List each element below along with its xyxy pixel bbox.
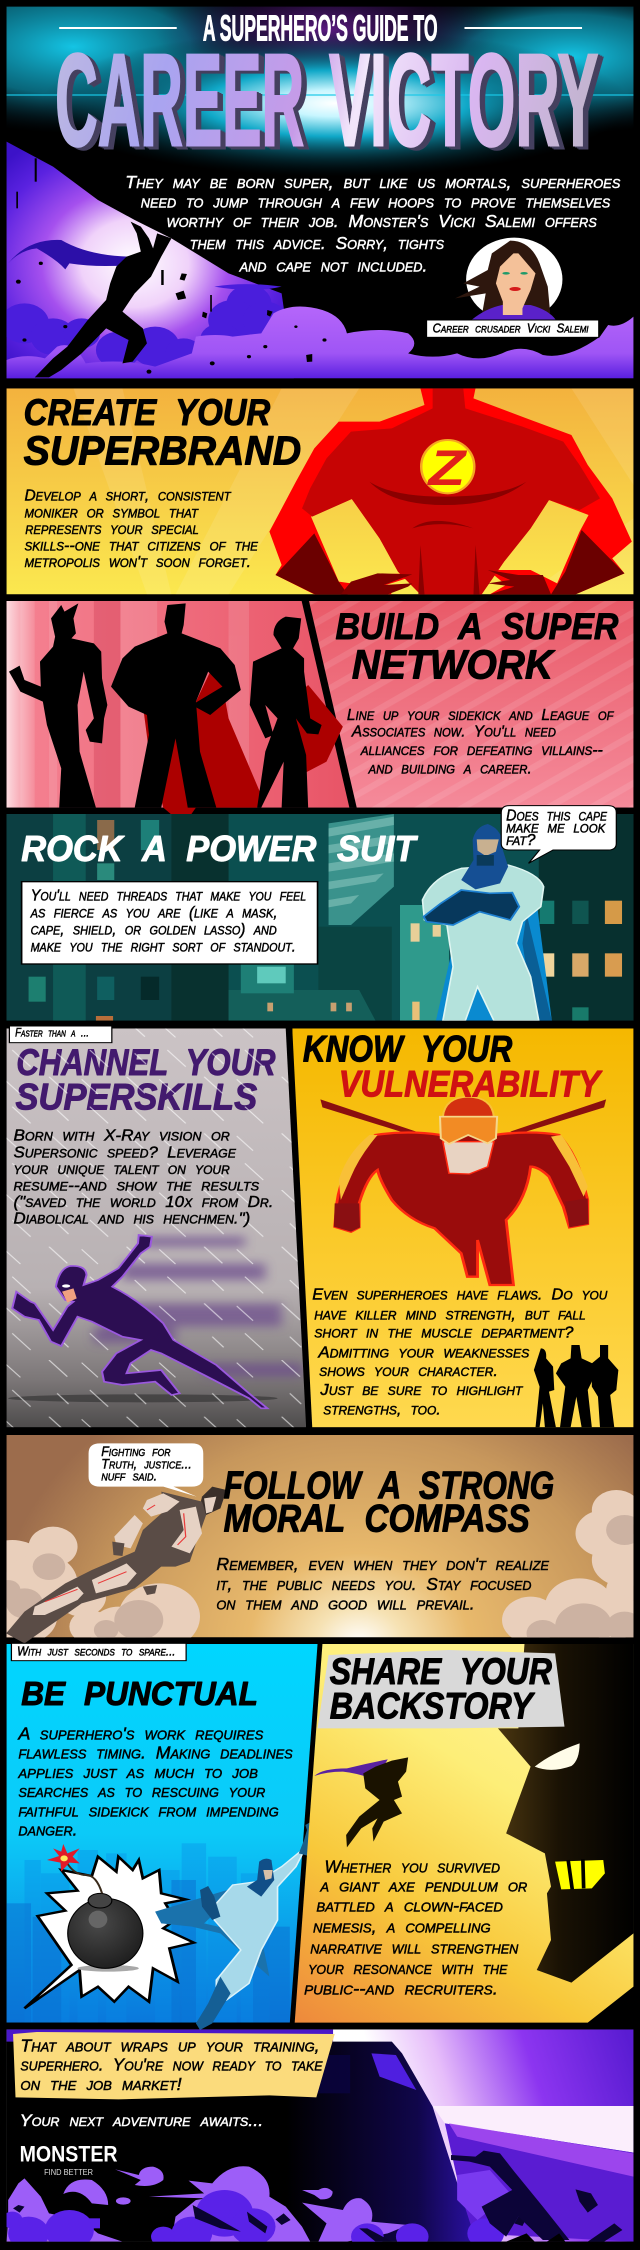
speech bubble: make me look [506,818,606,836]
center hero [111,603,241,808]
speech bubble: Does this cape [506,806,607,824]
panel: build a super network [7,601,637,825]
text box: You'll need threads that make you feel [31,886,306,904]
body text [24,486,258,571]
body text: represents your special [25,520,199,538]
logo: Monster [20,2143,118,2177]
panel: rock a power suit [7,806,633,1021]
hero torso [269,388,632,594]
intro text: them this advice. Sorry, tights [190,234,445,253]
speech bubble [89,1443,203,1497]
body text [17,1724,293,1840]
body text: your resonance with the [308,1959,508,1978]
body text: Develop a short, consistent [24,486,232,504]
divider [302,601,357,808]
blue clouds [0,284,288,368]
left hero [9,603,107,808]
mountain with glow [7,142,294,378]
text box: superhero. You're now ready to take [20,2055,323,2075]
label box: With just seconds to spare... [17,1644,176,1658]
panel: know your vulnerability [292,1028,633,1427]
body text: Supersonic speed? Leverage [13,1143,236,1161]
city skyline [24,1844,258,1928]
small silhouettes [534,1345,618,1427]
caption box [427,320,599,337]
body text: metropolis won't soon forget. [24,553,251,571]
panel: closing [2,2029,633,2250]
flying hero [320,1097,606,1285]
speech bubble: fat? [506,831,536,849]
body text: short in the muscle department? [314,1323,574,1341]
heading [24,391,301,473]
text box [13,2032,335,2099]
body text [13,1126,273,1227]
body text: and building a career. [368,759,532,777]
cape: center hero [143,672,261,825]
body text [312,1285,608,1418]
nebula background [0,0,640,177]
heading banner [318,1650,564,1728]
text box [22,882,318,964]
label box [11,1643,186,1661]
speech bubble: Truth, justice... [101,1457,192,1472]
body text: faithful sidekick from impending [18,1801,279,1821]
body text: nemesis, a compelling [313,1917,491,1937]
debris [16,158,327,374]
heading: SUPERBRAND [24,428,301,473]
body text: ("saved the world 10x from Dr. [13,1193,273,1211]
body text: public--and recruiters. [304,1979,498,1999]
label box [9,1026,112,1043]
lilac clouds [7,307,633,378]
panel: follow a strong moral compass [0,1435,640,1653]
body text: it, the public needs you. Stay focused [216,1575,531,1594]
body text [347,706,614,777]
body text: a giant axe pendulum or [319,1876,527,1896]
heading [303,1028,602,1105]
body text: shows your character. [319,1362,498,1380]
body text: A superhero's work requires [17,1724,264,1744]
villain face [498,1644,633,1983]
silhouettes: three heroes [9,603,343,825]
subtitle rules [59,27,582,29]
body text: have killer mind strength, but fall [314,1305,586,1323]
panel: create your superbrand [7,388,633,594]
intro text: and cape not included. [239,256,427,276]
hero in cape [422,824,552,1021]
explosion burst [24,1857,194,2008]
text box: as fierce as you are (like a mask, [30,903,278,921]
caption box: Career crusader Vicki Salemi [433,321,589,335]
body text: on them and good will prevail. [216,1594,475,1614]
panel: be punctual [7,1643,321,2030]
heading: CHANNEL YOUR [16,1041,276,1083]
speech bubble: nuff said. [101,1469,157,1484]
panel: header and intro [0,0,640,378]
body text: skills--one that citizens of the [24,536,258,554]
flying silhouette [314,1757,408,1847]
heading: NETWORK [352,642,556,687]
emblem: Z [426,439,467,496]
body text: Diabolical and his henchmen.") [13,1209,250,1227]
clouds [6,1490,634,1638]
logo: Monster: FIND BETTER [44,2168,93,2177]
body text: Whether you survived [324,1857,500,1877]
hero silhouette pushing [8,222,171,377]
debris [13,2189,622,2242]
intro text [125,173,621,276]
body text: moniker or symbol that [24,503,199,521]
portrait: Vicki Salemi [455,238,562,321]
body text: flawless timing. Making deadlines [18,1743,293,1763]
body text: Associates now. You'll need [351,722,556,740]
text box: That about wraps up your training, [20,2036,320,2056]
purple clouds [7,2166,408,2242]
body text: resume--and show the results [13,1176,259,1194]
body text: battled a clown-faced [316,1896,503,1916]
body text [216,1555,550,1614]
speech bubble [501,806,616,863]
body text: searches as to rescuing your [18,1782,265,1801]
heading: ROCK A POWER SUIT [21,829,418,869]
body text: applies just as much to job [17,1763,258,1782]
heading: SUPERSKILLS [16,1075,257,1117]
heading: BE PUNCTUAL [21,1675,258,1712]
body text: your unique talent on your [13,1160,230,1178]
panel: channel your superskills [7,1026,309,1427]
body text: danger. [18,1820,78,1840]
heading [336,605,618,687]
body text: narrative will strengthen [310,1938,519,1958]
heading banner: SHARE YOUR [330,1650,552,1692]
city buildings [7,814,633,1021]
heading: CREATE YOUR [24,391,270,433]
motion blur [94,1237,302,1377]
running heroine [12,1235,267,1408]
heading banner: BACKSTORY [330,1684,535,1726]
text box: on the job market! [20,2075,182,2094]
heading [224,1463,554,1541]
cape: right hero [265,672,343,773]
body text: Just be sure to highlight [319,1381,523,1399]
armored hero [6,1487,227,1643]
rock silhouette [7,2042,473,2242]
text box: make you the right sort of standout. [31,937,296,955]
panel: share your backstory [295,1644,633,2023]
flying hero [155,1820,320,2030]
body text [304,1857,527,1999]
body text: Remember, even when they don't realize [216,1555,550,1574]
logo: Monster: MONSTER [20,2143,118,2167]
speech bubble: Fighting for [101,1444,171,1460]
heading [16,1048,276,1110]
text box: cape, shield, or golden lasso) and [31,920,277,938]
right hero [250,617,322,808]
body text: Born with X-Ray vision or [13,1126,230,1144]
label box: Faster than a ... [15,1026,89,1039]
pushing hero [451,2151,569,2242]
body text: Admitting your weaknesses [317,1343,530,1361]
heading: KNOW YOUR [303,1028,512,1070]
bomb [47,1844,143,1972]
body text: strengths, too. [323,1400,441,1418]
next adventure line: Your next adventure awaits... [20,2111,263,2130]
